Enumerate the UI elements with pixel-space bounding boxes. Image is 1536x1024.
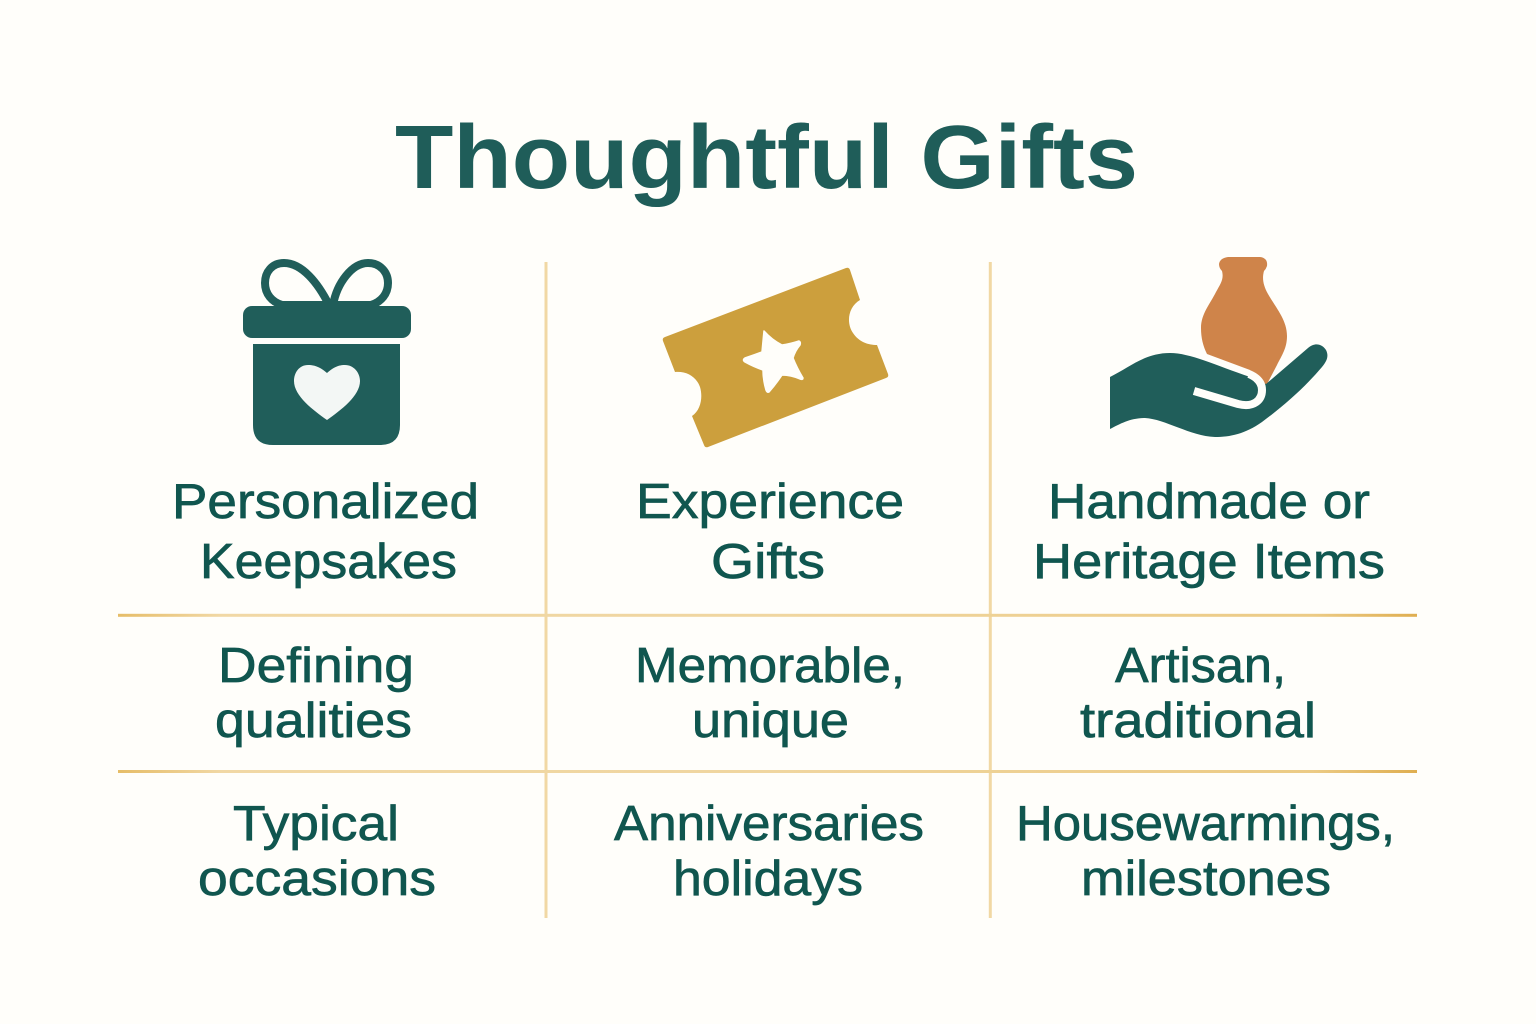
icon: hand holding vase [1110, 257, 1327, 437]
row label: defining qualities [215, 639, 414, 748]
column 1 heading line 2: Keepsakes [200, 535, 457, 589]
row label: typical occasions: occasions [198, 852, 436, 906]
column 3 heading: Handmade or [1048, 475, 1370, 529]
cell: anniversaries, holidays [614, 797, 924, 906]
cell: memorable, unique: unique [692, 694, 849, 748]
column 1 heading: Personalized [172, 475, 479, 529]
cell: memorable, unique [635, 639, 905, 748]
title: Thoughtful Gifts [395, 108, 1138, 208]
cell: housewarmings, milestones: milestones [1081, 852, 1331, 906]
cell: anniversaries, holidays: holidays [673, 852, 863, 906]
grid lines [118, 262, 1417, 918]
cell: memorable, unique: Memorable, [635, 639, 905, 693]
row label: typical occasions [198, 797, 436, 906]
row label: typical occasions: Typical [233, 797, 399, 851]
icon: ticket with star [663, 268, 888, 447]
cell: housewarmings, milestones: Housewarmings, [1016, 797, 1395, 851]
row label: defining qualities: Defining [218, 639, 414, 693]
column 3 heading line 2: Heritage Items [1033, 535, 1385, 589]
cell: artisan, traditional: Artisan, [1115, 639, 1286, 693]
cell: housewarmings, milestones [1016, 797, 1395, 906]
cell: anniversaries, holidays: Anniversaries [614, 797, 924, 851]
cell: artisan, traditional [1080, 639, 1316, 748]
icon: gift box with heart [243, 263, 411, 445]
column 2 heading: Experience [636, 475, 904, 529]
column 2 heading line 2: Gifts [711, 535, 825, 589]
cell: artisan, traditional: traditional [1080, 694, 1316, 748]
row label: defining qualities: qualities [215, 694, 412, 748]
